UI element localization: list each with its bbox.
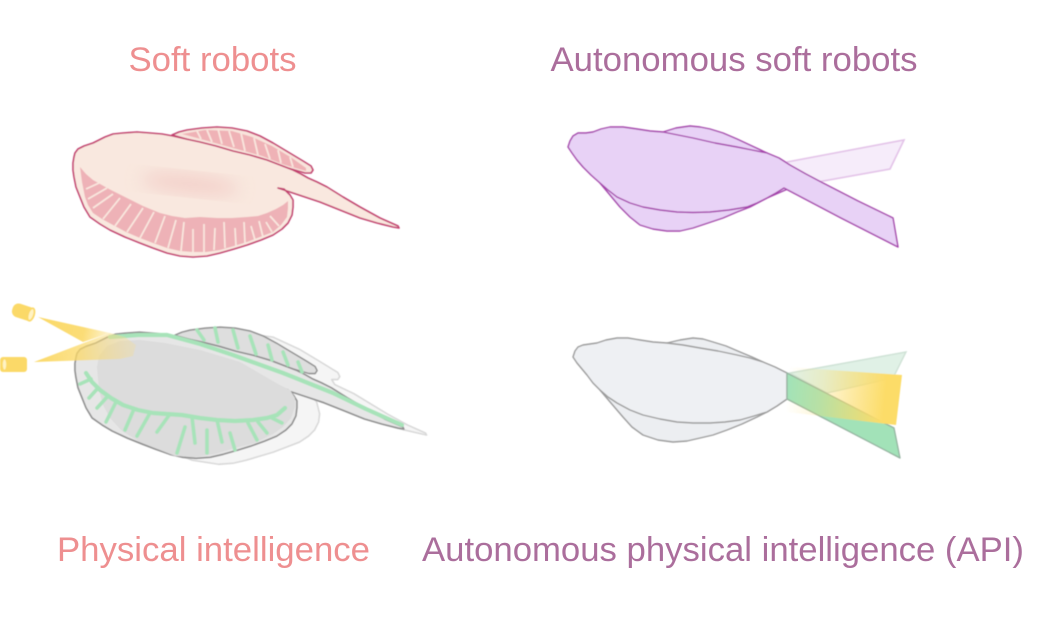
- body shading: [140, 172, 240, 196]
- back fin ribs: [197, 129, 293, 167]
- ghost inner darker area: [97, 340, 295, 457]
- title: autonomous soft robots: Autonomous soft robots: [550, 41, 918, 79]
- title: autonomous physical intelligence (API): Autonomous physical intelligence (API): [422, 531, 1024, 569]
- back fin: [172, 127, 313, 173]
- lower band ribs: [86, 183, 279, 253]
- back body: [600, 126, 790, 231]
- icon: camera bottom: [0, 357, 27, 372]
- camera beam bottom: [34, 333, 136, 362]
- lower muscle band: [80, 167, 288, 252]
- ghost tail: [784, 140, 904, 188]
- actuators and sensors: [86, 335, 402, 425]
- title: soft robots: Soft robots: [128, 41, 296, 79]
- muscle ribs: [80, 328, 302, 453]
- body: [75, 332, 404, 458]
- camera beam top: [38, 317, 110, 342]
- robot: physical intelligence: [0, 302, 427, 464]
- back fin: [175, 327, 317, 374]
- ghost robot: [98, 333, 427, 464]
- main body with tail: [568, 127, 898, 247]
- ghost tail: [790, 352, 906, 393]
- icon: camera top: [10, 302, 37, 322]
- title: physical intelligence: Physical intelligence: [57, 531, 370, 569]
- main body: [573, 338, 787, 423]
- body: [73, 132, 399, 257]
- robot: autonomous physical intelligence: [573, 338, 906, 458]
- back body: [600, 338, 787, 442]
- soft green tail: [787, 373, 900, 458]
- light beam on tail: [787, 367, 902, 425]
- robot: soft robot: [73, 127, 399, 257]
- robot: autonomous soft robot: [568, 126, 904, 247]
- back fin muscle band: [182, 130, 306, 171]
